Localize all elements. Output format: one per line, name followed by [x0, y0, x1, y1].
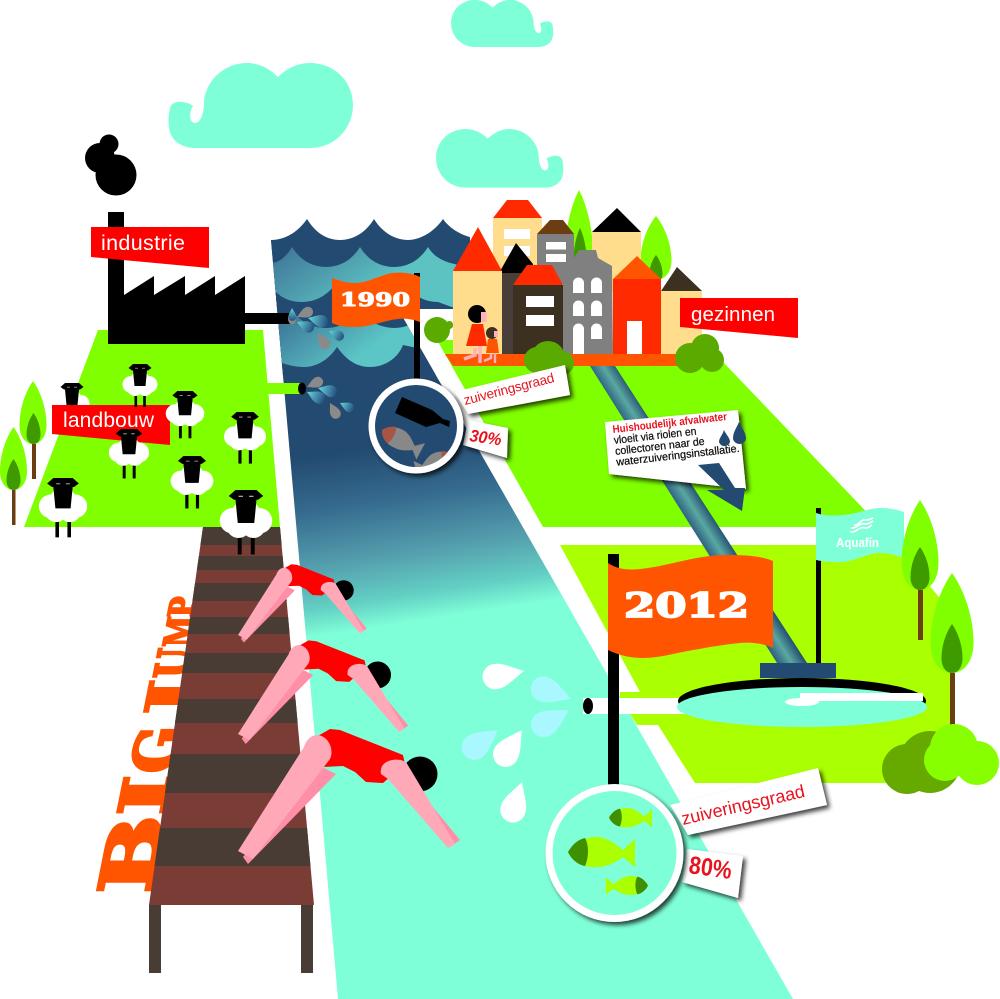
label: gezinnen: gezinnen	[691, 303, 775, 326]
label: landbouw: landbouw	[63, 409, 155, 432]
icon: fish bottom	[606, 876, 648, 895]
label: zuiveringsgraad	[454, 365, 570, 414]
sheep: behind label	[54, 383, 90, 426]
flag: Aquafin	[816, 508, 904, 663]
info box: huishoudelijk afvalwater	[605, 410, 746, 511]
river with waves	[250, 205, 800, 999]
clean water discharge pipe	[583, 698, 713, 714]
label: landbouw	[52, 405, 170, 445]
spray: clean water	[457, 659, 575, 826]
big jump title	[83, 597, 205, 893]
road strip	[445, 354, 680, 366]
big jump title: I	[104, 775, 187, 815]
flock of sheep	[39, 364, 266, 537]
icon: fish top	[609, 808, 652, 827]
diving board	[149, 527, 314, 973]
flag: 1990: 1990	[340, 289, 410, 311]
label: zuiveringsgraad: zuiveringsgraad	[462, 370, 556, 408]
bushes at houses	[424, 317, 724, 375]
big jump title: M	[154, 616, 205, 647]
arrow: flow direction	[698, 463, 745, 511]
trees behind houses	[565, 190, 672, 282]
field: waterzuivering	[560, 545, 950, 783]
factory	[108, 212, 245, 344]
diver: near	[238, 729, 460, 864]
cloud: left	[168, 63, 353, 148]
icon: dead fish small	[413, 451, 448, 467]
label: industrie: industrie	[101, 231, 185, 255]
info box: huishoudelijk afvalwater: vloeit via riolen en	[613, 426, 697, 447]
field: landbouw	[24, 330, 280, 527]
label: gezinnen	[680, 298, 798, 338]
big jump title: B	[83, 816, 183, 893]
info box: huishoudelijk afvalwater: waterzuiveringsinstallatie.	[615, 443, 740, 469]
people	[464, 305, 499, 363]
house: dark black roof	[499, 243, 533, 354]
label: industrie	[91, 227, 209, 268]
person: mother	[464, 305, 487, 363]
big jump title: J	[133, 680, 202, 720]
house: cream tall red roof	[453, 227, 502, 354]
flag: 2012: 2012	[624, 586, 749, 626]
trees: right	[902, 500, 974, 725]
label: 80%: 80%	[687, 851, 734, 885]
factory discharge pipe	[245, 312, 296, 324]
field: gezinnen	[437, 340, 881, 527]
diver: middle	[238, 640, 408, 744]
bushes: right	[882, 724, 999, 794]
factory smoke	[85, 134, 136, 196]
pipe: to treatment plant	[590, 366, 807, 663]
house: cream black roof	[592, 208, 641, 292]
cloud: top	[451, 0, 553, 47]
label: 30%	[463, 420, 508, 458]
agricultural discharge pipe	[265, 382, 306, 394]
label: 30%: 30%	[468, 426, 503, 449]
info box: huishoudelijk afvalwater: collectoren naar de	[614, 436, 705, 458]
callout: zuiveringsgraad 1990	[368, 365, 570, 477]
houses	[453, 200, 702, 354]
label: 80%	[682, 849, 743, 898]
big jump title: P	[161, 597, 205, 617]
cloud: middle	[436, 129, 563, 188]
house: cream right	[661, 267, 702, 354]
callout: zuiveringsgraad 2012	[546, 768, 827, 922]
house: grey gabled	[563, 250, 613, 354]
house: dark brown red roof	[513, 265, 563, 354]
info box: huishoudelijk afvalwater: Huishoudelijk afvalwater	[612, 411, 728, 436]
treatment plant	[677, 663, 927, 727]
flag: 2012	[608, 554, 773, 786]
big jump title: U	[144, 648, 203, 678]
house: red with door	[613, 256, 661, 354]
flag: 1990	[332, 273, 420, 379]
label: zuiveringsgraad: zuiveringsgraad	[679, 781, 807, 829]
icon: bottle	[395, 397, 450, 427]
diver: far	[238, 564, 367, 643]
icon: dead fish	[382, 426, 425, 460]
person: child	[484, 327, 499, 363]
spray: agriculture	[304, 375, 356, 421]
spray: factory	[288, 305, 346, 351]
house: grey brown roof	[537, 220, 574, 284]
trees: left	[0, 381, 46, 525]
icon: fish large	[568, 837, 635, 867]
sheep: on board	[220, 490, 272, 554]
house: back red roof	[493, 200, 542, 278]
big jump title: G	[116, 726, 198, 773]
flag: Aquafin: Aquafin	[836, 536, 879, 550]
label: zuiveringsgraad	[670, 768, 827, 835]
magnifier: clean water	[546, 784, 684, 922]
magnifier: polluted water	[368, 378, 464, 477]
icon: water drops	[719, 422, 746, 446]
